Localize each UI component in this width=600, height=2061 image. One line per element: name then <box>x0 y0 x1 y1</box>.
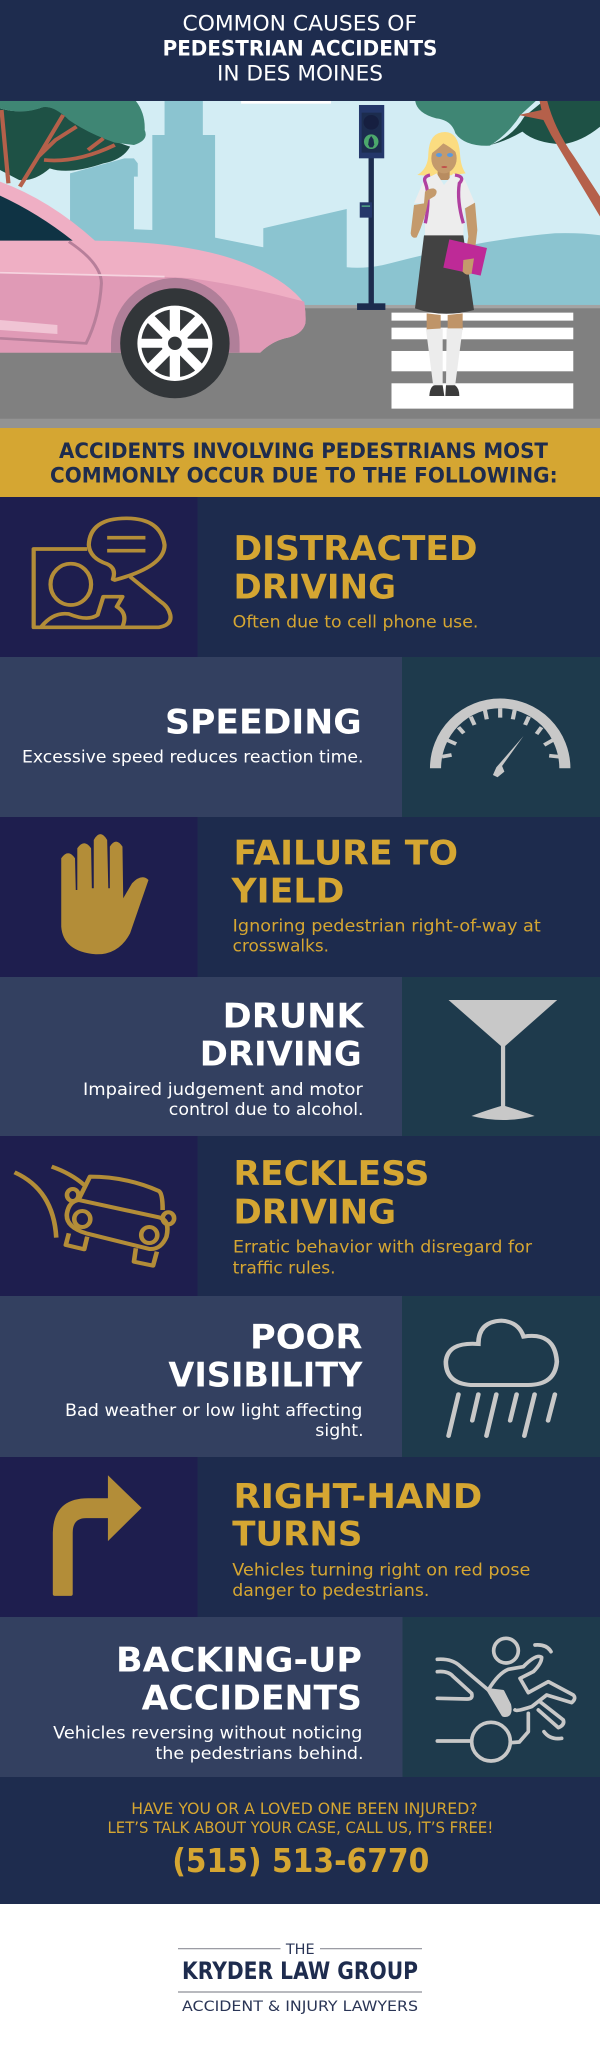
pedestrian traffic light <box>357 105 385 310</box>
description: poor visibility <box>65 1401 364 1440</box>
header panel <box>0 0 600 101</box>
title: backing-up accidents <box>116 1641 362 1718</box>
title: reckless driving: DRIVING <box>234 1192 396 1232</box>
icon: martini glass <box>449 1000 557 1120</box>
description: distracted driving: Often due to cell phone use. <box>233 613 478 632</box>
description: failure to yield: Ignoring pedestrian right-of-way at <box>233 917 541 936</box>
banner text: COMMONLY OCCUR DUE TO THE FOLLOWING: <box>50 464 558 489</box>
phone number: (515) 513-6770 <box>172 1841 429 1880</box>
description: right-hand turns: danger to pedestrians. <box>232 1581 429 1600</box>
description: failure to yield <box>233 917 541 956</box>
description: drunk driving: Impaired judgement and motor <box>83 1080 363 1099</box>
description: poor visibility: sight. <box>315 1421 364 1440</box>
title: right-hand turns: TURNS <box>232 1515 362 1555</box>
description: speeding: Excessive speed reduces reaction time. <box>22 748 364 767</box>
title: reckless driving: RECKLESS <box>234 1154 429 1194</box>
logo: The Kryder Law Group: KRYDER LAW GROUP <box>182 1957 418 1985</box>
title: failure to yield: FAILURE TO <box>234 833 458 873</box>
description: reckless driving: Erratic behavior with disregard for <box>233 1237 532 1256</box>
description: failure to yield: crosswalks. <box>233 937 329 956</box>
crosswalk <box>392 313 573 409</box>
title: distracted driving: DISTRACTED <box>234 529 478 569</box>
panel: reckless driving <box>0 1136 600 1296</box>
description: drunk driving: control due to alcohol. <box>169 1100 364 1119</box>
tree left <box>0 101 146 187</box>
logo: The Kryder Law Group: ACCIDENT & INJURY LAWYERS <box>182 1999 418 2015</box>
description: drunk driving <box>83 1080 364 1119</box>
title: failure to yield: YIELD <box>230 872 344 912</box>
street scene illustration <box>0 101 600 428</box>
title: right-hand turns: RIGHT-HAND <box>234 1477 482 1517</box>
description: backing-up accidents <box>53 1724 364 1763</box>
icon: right turn arrow <box>53 1475 142 1596</box>
call to action panel <box>0 1777 600 1904</box>
girl pedestrian <box>411 132 487 396</box>
description: right-hand turns: Vehicles turning right on red pose <box>232 1561 530 1580</box>
panel: right-hand turns <box>0 1457 600 1617</box>
icon: speedometer <box>436 703 565 777</box>
icon: distracted driver <box>34 518 171 627</box>
banner text <box>50 439 558 489</box>
title: IN DES MOINES <box>217 62 383 86</box>
panel: poor visibility <box>0 1296 600 1457</box>
description: backing-up accidents: the pedestrians behind. <box>155 1744 364 1763</box>
icon: swerving car <box>15 1167 174 1266</box>
banner text: ACCIDENTS INVOLVING PEDESTRIANS MOST <box>59 439 548 464</box>
panel: backing-up accidents <box>0 1617 600 1777</box>
description: reckless driving <box>233 1237 532 1277</box>
banner <box>0 428 600 497</box>
call to action text: HAVE YOU OR A LOVED ONE BEEN INJURED? <box>131 1799 478 1818</box>
title: right-hand turns <box>232 1477 482 1555</box>
title: distracted driving <box>234 529 478 607</box>
title: PEDESTRIAN ACCIDENTS <box>163 36 437 60</box>
panel: distracted driving <box>0 497 600 657</box>
description: backing-up accidents: Vehicles reversing without noticing <box>53 1724 362 1743</box>
title: backing-up accidents: ACCIDENTS <box>142 1678 362 1718</box>
title: speeding: SPEEDING <box>165 702 362 742</box>
road <box>0 305 600 428</box>
description: poor visibility: Bad weather or low light affecting <box>65 1401 362 1420</box>
title: distracted driving: DRIVING <box>234 567 396 607</box>
title: backing-up accidents: BACKING-UP <box>116 1641 362 1681</box>
description: reckless driving: traffic rules. <box>233 1258 336 1277</box>
panel: speeding <box>0 657 600 817</box>
icon: raised hand <box>61 834 148 954</box>
title: COMMON CAUSES OF <box>182 12 417 36</box>
tree right <box>415 101 600 217</box>
title: drunk driving <box>200 996 365 1075</box>
title: poor visibility <box>168 1317 363 1396</box>
logo: The Kryder Law Group: THE <box>285 1942 315 1958</box>
description: right-hand turns <box>232 1561 530 1600</box>
call to action text <box>108 1799 493 1837</box>
title: failure to yield <box>230 833 458 912</box>
panel: drunk driving <box>0 977 600 1136</box>
call to action text: LET’S TALK ABOUT YOUR CASE, CALL US, IT’S FREE! <box>108 1818 493 1837</box>
pink car <box>0 182 306 398</box>
logo: The Kryder Law Group <box>178 1942 422 2015</box>
skyline and hills <box>0 101 600 307</box>
title <box>163 12 437 86</box>
icon: rain cloud <box>446 1321 557 1436</box>
icon: car hitting pedestrian <box>437 1638 575 1761</box>
title: poor visibility: VISIBILITY <box>168 1356 363 1396</box>
title: drunk driving: DRIVING <box>200 1035 362 1075</box>
panel: failure to yield <box>0 817 600 977</box>
title: reckless driving <box>234 1154 429 1232</box>
title: drunk driving: DRUNK <box>223 996 365 1036</box>
title: poor visibility: POOR <box>250 1317 362 1357</box>
